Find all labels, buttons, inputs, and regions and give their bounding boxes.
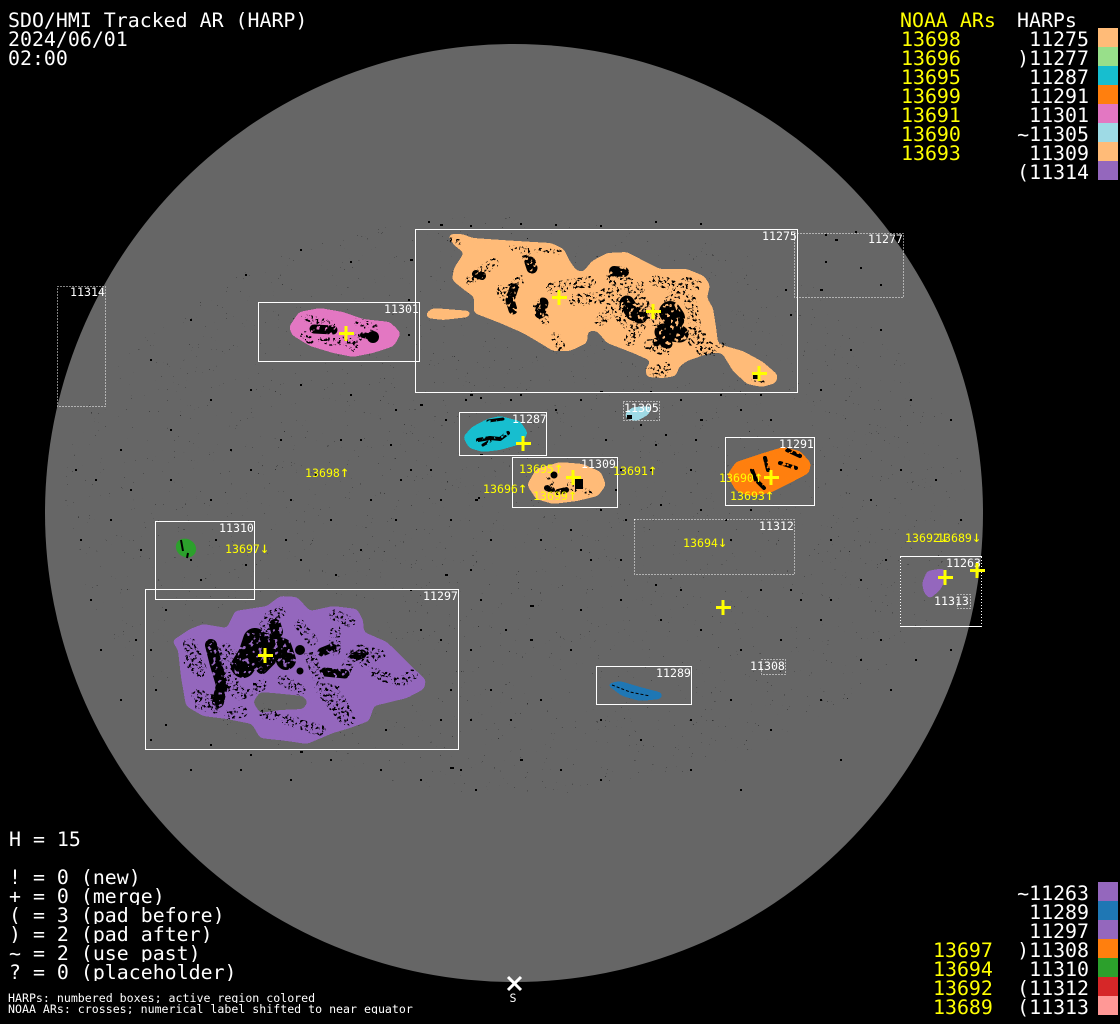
region: HARP 11314	[58, 285, 106, 406]
footnote	[0, 991, 440, 1020]
bottom legend: NOAA ARs and HARPs: 11297	[1029, 920, 1089, 943]
scattered small magnetic specks across the disc	[75, 222, 962, 790]
NOAA AR numeric labels	[225, 459, 981, 557]
bottom legend: NOAA ARs and HARPs: 11289	[1029, 901, 1089, 924]
flag count summary: ~ = 2 (use past)	[9, 942, 201, 965]
NOAA AR numeric labels: 13692↓	[905, 528, 949, 546]
NOAA AR numeric labels: 13690↑	[719, 468, 763, 486]
fine magnetic dust across the active latitudes	[62, 215, 966, 795]
top legend: NOAA ARs and HARPs: 13699	[901, 85, 961, 108]
bottom legend: NOAA ARs and HARPs: 13692	[933, 977, 993, 1000]
sunspots in 11287	[478, 419, 508, 445]
region: HARP 11277	[794, 232, 904, 298]
region: HARP 11297: 11297	[423, 589, 458, 603]
region: HARP 11263 and 11313: 11263	[946, 556, 981, 570]
region: HARP 11291	[726, 437, 814, 506]
flag count summary	[0, 828, 250, 991]
region: HARP 11309	[512, 457, 618, 508]
top legend: NOAA ARs and HARPs: 11287	[1029, 66, 1089, 89]
south pole marker	[508, 977, 521, 1005]
title block: 2024/06/01	[8, 28, 128, 51]
region: HARP 11263 and 11313	[900, 556, 982, 626]
flag count summary: ( = 3 (pad before)	[9, 904, 225, 927]
region: HARP 11312: 11312	[759, 519, 794, 533]
top legend: NOAA ARs and HARPs: 13690	[901, 123, 961, 146]
bottom legend: NOAA ARs and HARPs: 13689	[933, 996, 993, 1019]
title block: 02:00	[8, 47, 68, 70]
bottom legend: NOAA ARs and HARPs: (11313	[1017, 996, 1089, 1019]
bottom legend: NOAA ARs and HARPs: ~11263	[1017, 882, 1089, 905]
NOAA AR numeric labels: 13697↓	[225, 539, 269, 557]
active region 11309	[527, 462, 606, 504]
top legend: NOAA ARs and HARPs: 13698	[901, 28, 961, 51]
region: HARP 11291: 11291	[779, 437, 814, 451]
bottom legend: NOAA ARs and HARPs	[933, 882, 1118, 1019]
region: HARP 11275	[416, 229, 798, 392]
title block: SDO/HMI Tracked AR (HARP)	[8, 9, 307, 32]
region: HARP 11305	[624, 401, 660, 421]
title block	[8, 9, 307, 70]
region: HARP 11312	[634, 519, 794, 574]
region: HARP 11289: 11289	[656, 666, 691, 680]
NOAA AR numeric labels: 13691↑	[613, 461, 657, 479]
flag count summary: ! = 0 (new)	[9, 866, 141, 889]
top legend: NOAA ARs and HARPs: 11301	[1029, 104, 1089, 127]
flag count summary: ) = 2 (pad after)	[9, 923, 213, 946]
NOAA AR numeric labels: 13698↑	[305, 463, 349, 481]
active region 11275 colored patch	[426, 234, 778, 387]
sunspots in 11301	[304, 318, 379, 348]
top legend: NOAA ARs and HARPs: 13696	[901, 47, 961, 70]
sunspots in 11275	[450, 240, 762, 382]
footnote: HARPs: numbered boxes; active region colored	[8, 991, 315, 1005]
region: HARP 11287	[460, 412, 547, 456]
region: HARP 11263 and 11313: 11313	[934, 594, 969, 608]
harp box 11275	[416, 230, 798, 392]
region: HARP 11287: 11287	[512, 412, 547, 426]
top legend: NOAA ARs and HARPs: 13691	[901, 104, 961, 127]
sunspots in 11297	[190, 612, 412, 730]
top legend: NOAA ARs and HARPs: (11314	[1017, 161, 1089, 184]
NOAA AR numeric labels: 13699↑	[533, 486, 577, 504]
flag count summary: ? = 0 (placeholder)	[9, 961, 237, 984]
sunspots in 11309	[547, 472, 590, 494]
NOAA AR numeric labels: 13696↑	[483, 479, 527, 497]
NOAA AR numeric labels: 13693↑	[730, 486, 774, 504]
active region 11301	[289, 308, 401, 357]
top legend: NOAA ARs and HARPs: 13693	[901, 142, 961, 165]
top legend: NOAA ARs and HARPs: )11277	[1017, 47, 1089, 70]
top legend: NOAA ARs and HARPs: 11275	[1029, 28, 1089, 51]
bottom legend: NOAA ARs and HARPs: )11308	[1017, 939, 1089, 962]
bottom legend: NOAA ARs and HARPs: 11310	[1029, 958, 1089, 981]
region: HARP 11310: 11310	[219, 521, 254, 535]
top legend: NOAA ARs and HARPs: 11291	[1029, 85, 1089, 108]
region: HARP 11277: 11277	[868, 232, 903, 246]
NOAA AR numeric labels: 13695↑	[519, 459, 563, 477]
top legend: NOAA ARs and HARPs: 13695	[901, 66, 961, 89]
top legend: NOAA ARs and HARPs: 11309	[1029, 142, 1089, 165]
active region 11291	[727, 447, 811, 496]
bottom legend: NOAA ARs and HARPs: 13694	[933, 958, 993, 981]
top legend: NOAA ARs and HARPs: ~11305	[1017, 123, 1089, 146]
top legend: NOAA ARs and HARPs: NOAA ARs	[900, 9, 996, 32]
region: HARP 11309: 11309	[581, 457, 616, 471]
region: HARP 11301: 11301	[384, 302, 419, 316]
active region 11287	[463, 416, 528, 452]
bottom legend: NOAA ARs and HARPs: 13697	[933, 939, 993, 962]
NOAA AR numeric labels: 13689↓	[937, 528, 981, 546]
top legend: NOAA ARs and HARPs	[900, 9, 1118, 184]
region: HARP 11301	[258, 302, 420, 362]
flag count summary: H = 15	[9, 828, 81, 851]
NOAA AR numeric labels: 13694↓	[683, 533, 727, 551]
region: HARP 11297	[146, 589, 458, 750]
active region 11289	[606, 681, 663, 701]
active region 11263	[922, 568, 946, 599]
label 11275: 11275	[762, 229, 797, 243]
top legend: NOAA ARs and HARPs: HARPs	[1017, 9, 1077, 32]
flag count summary: + = 0 (merge)	[9, 885, 165, 908]
region: HARP 11305: 11305	[624, 401, 659, 415]
active region 11310	[172, 535, 200, 561]
active region 11297	[172, 596, 426, 744]
region: HARP 11289	[596, 666, 692, 704]
region: HARP 11308: 11308	[750, 659, 785, 673]
region: HARP 11314: 11314	[70, 285, 105, 299]
solar disc	[45, 44, 983, 982]
south pole marker: S	[510, 991, 517, 1005]
bottom legend: NOAA ARs and HARPs: (11312	[1017, 977, 1089, 1000]
region: HARP 11310	[156, 521, 254, 600]
footnote: NOAA ARs: crosses; numerical label shifted to near equator	[8, 1002, 413, 1016]
sunspots in 11291	[752, 450, 800, 488]
NOAA AR crosses	[258, 290, 985, 663]
